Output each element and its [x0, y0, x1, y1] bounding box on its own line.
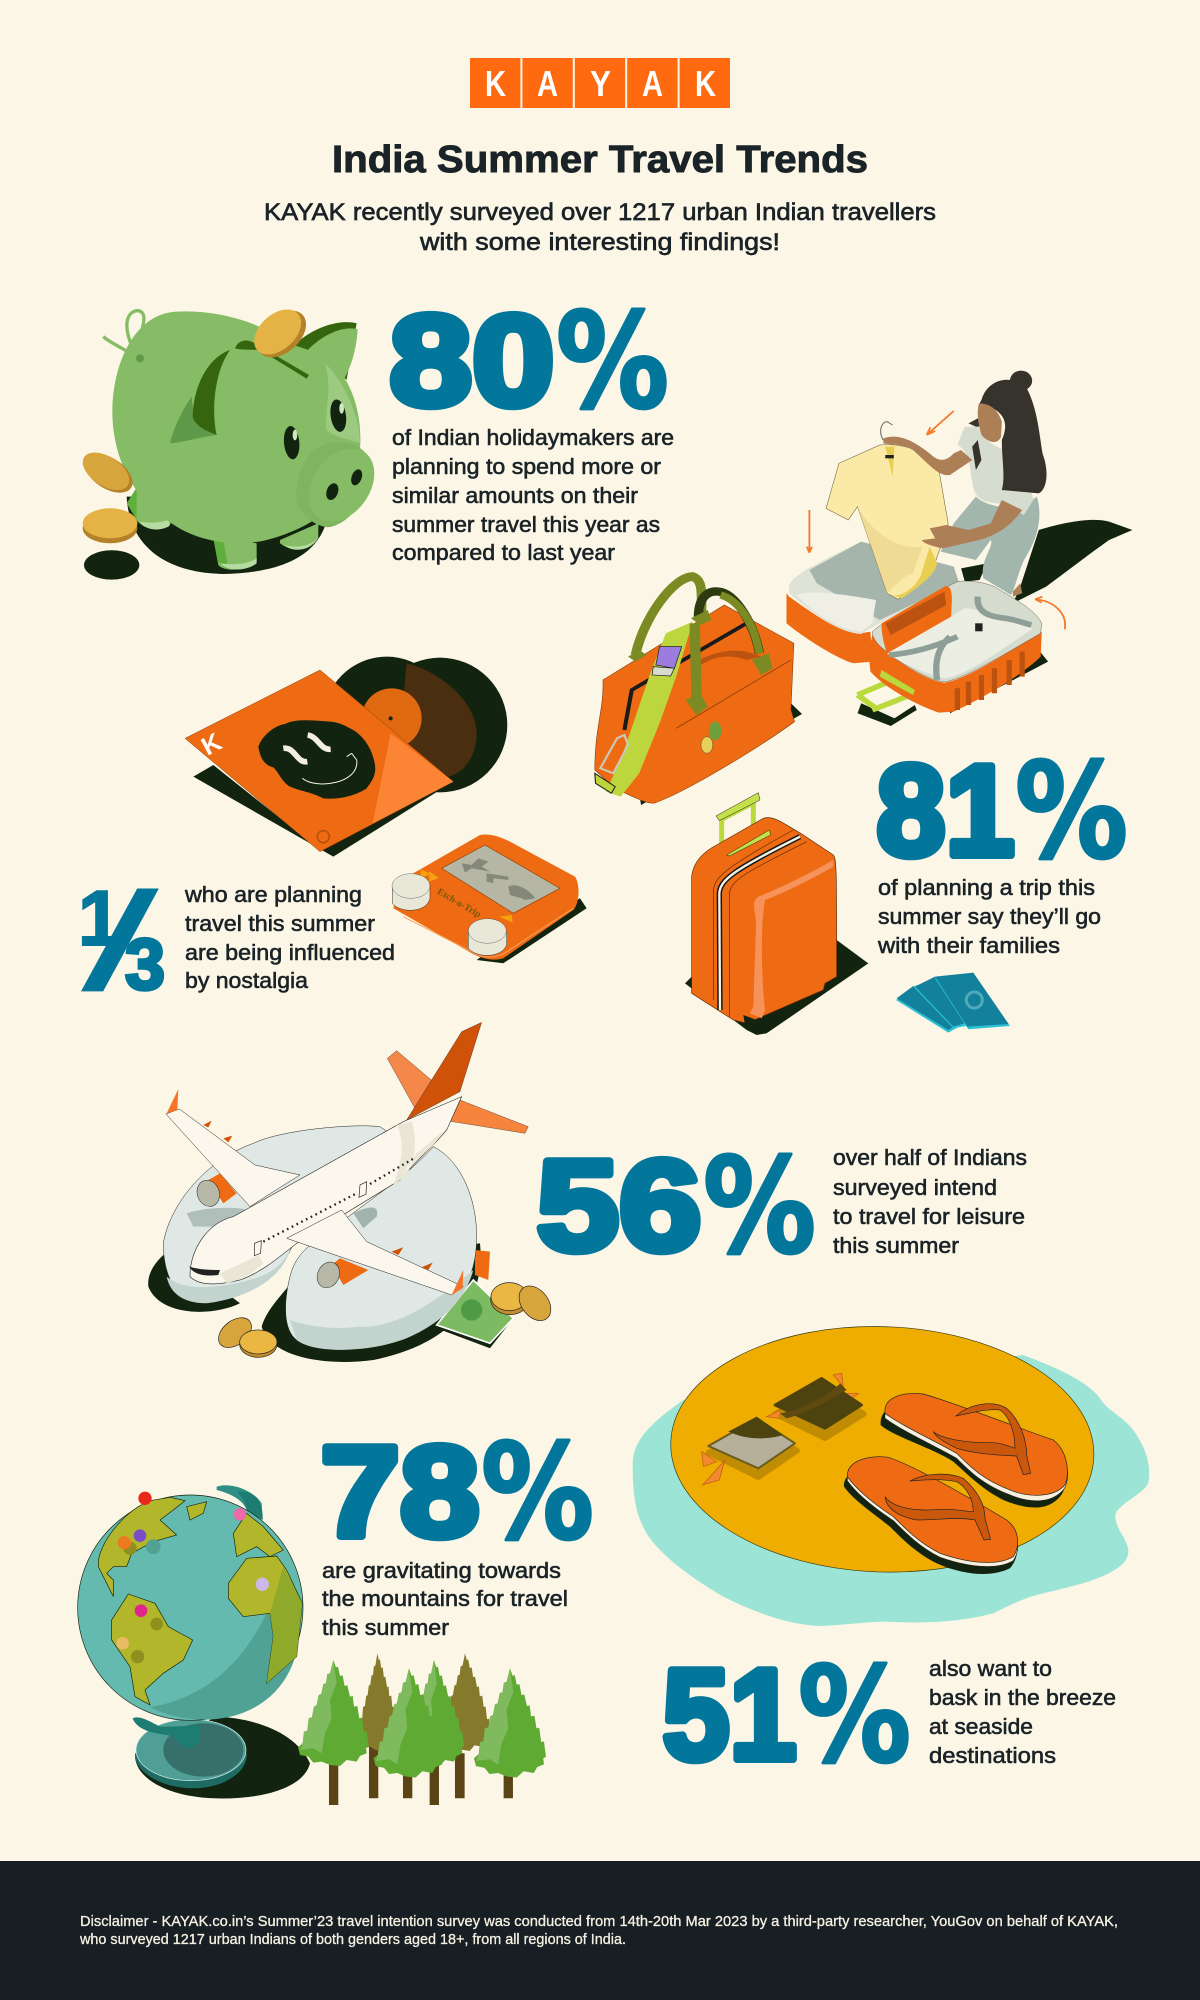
illustration: globe with pins — [78, 1485, 310, 1798]
text: nostalgia — [184, 882, 395, 993]
stat: 56%: 56 — [536, 1134, 702, 1278]
footer panel: disclaimer: Disclaimer - KAYAK.co.in’s Summer’23 travel intention survey was conducted from 14th-20th Mar 2023 by a third-party researcher, YouGov on behalf of KAYAK, — [80, 1914, 1118, 1930]
stand — [133, 1485, 263, 1788]
illustration: etch-a-sketch toy: Etch-a-Trip — [435, 886, 483, 920]
water — [633, 1355, 1149, 1626]
torso — [957, 427, 1033, 515]
text: nostalgia: travel this summer — [185, 911, 376, 936]
illustration: orange duffel bag — [595, 577, 802, 805]
text: leisure: this summer — [833, 1233, 960, 1258]
text: 80% description: of Indian holidaymakers are — [392, 425, 674, 450]
stat: 51% — [662, 1639, 911, 1793]
plane tail — [387, 1051, 433, 1108]
text: leisure: over half of Indians — [833, 1145, 1027, 1170]
stat: 78%: 78 — [320, 1420, 480, 1564]
front wing — [332, 1258, 368, 1285]
illustration: pine trees — [298, 1653, 546, 1805]
sunglasses — [702, 1373, 864, 1485]
text: mountains: are gravitating towards — [322, 1558, 561, 1583]
stat: 78%: % — [481, 1416, 594, 1570]
text: seaside: bask in the breeze — [929, 1685, 1116, 1710]
hair — [968, 380, 1047, 493]
text: nostalgia: are being influenced — [185, 940, 395, 965]
stat: 78% — [320, 1416, 594, 1570]
illustration: wheeled suitcase — [685, 793, 868, 1035]
text: leisure — [833, 1145, 1027, 1258]
text: families: summer say they’ll go — [878, 904, 1101, 929]
flip-flop: bottom — [844, 1457, 1018, 1574]
map pins — [116, 1492, 269, 1663]
stat: 80% — [390, 285, 669, 439]
text: families: of planning a trip this — [878, 875, 1095, 900]
text: seaside: also want to — [929, 1656, 1052, 1681]
arrows — [807, 411, 1065, 629]
text: 80% description — [392, 425, 674, 565]
shirt — [826, 445, 948, 599]
text: mountains: the mountains for travel — [322, 1586, 568, 1611]
illustration: vinyl record: K — [197, 728, 227, 761]
footer panel: disclaimer: who surveyed 1217 urban Indians of both genders aged 18+, from all regions of India. — [79, 1932, 626, 1948]
stat: 1/3 fraction: / — [81, 864, 159, 1020]
stat: 51%: 51 — [662, 1643, 796, 1787]
text: mountains — [322, 1558, 568, 1640]
illustration: etch-a-sketch toy — [392, 835, 587, 963]
stat: 81%: % — [1015, 735, 1128, 889]
illustration: beach mat, sunglasses and flip-flops — [633, 1319, 1149, 1626]
illustration: vinyl record — [185, 657, 507, 857]
suitcase right half — [858, 581, 1048, 726]
logo: KAYAK: K — [695, 63, 716, 104]
logo: KAYAK — [470, 58, 730, 108]
head — [978, 403, 1002, 442]
title: India Summer Travel Trends — [332, 139, 868, 181]
logo: KAYAK: A — [537, 63, 558, 104]
stat: 81%: 81 — [876, 739, 1014, 883]
text: seaside — [929, 1656, 1116, 1768]
continents — [98, 1497, 302, 1705]
text: leisure: to travel for leisure — [833, 1204, 1025, 1229]
text: 80% description: compared to last year — [392, 540, 616, 565]
stat: 56%: % — [703, 1130, 816, 1284]
flip-flop: top — [881, 1393, 1068, 1508]
stat: 1/3 fraction: 1 — [78, 874, 121, 962]
stat: 56% — [536, 1130, 816, 1284]
text: nostalgia: by nostalgia — [185, 968, 308, 993]
subtitle: KAYAK recently surveyed over 1217 urban Indian travellers — [264, 199, 936, 226]
text: seaside: destinations — [929, 1743, 1056, 1768]
money and coins — [213, 1250, 557, 1357]
stat: 51%: % — [798, 1639, 911, 1793]
stat: 80%: 80 — [390, 289, 554, 433]
text: 80% description: planning to spend more or — [392, 454, 662, 479]
logo: KAYAK: A — [642, 63, 663, 104]
globe sphere — [78, 1495, 303, 1720]
text: mountains: this summer — [322, 1615, 450, 1640]
subtitle: with some interesting findings! — [419, 229, 780, 256]
text: families: with their families — [877, 933, 1060, 958]
logo: KAYAK: K — [485, 63, 506, 104]
rear wing — [166, 1109, 300, 1207]
logo: KAYAK: Y — [590, 63, 611, 104]
suitcase left half — [786, 542, 959, 663]
stat: 1/3 fraction: 3 — [125, 925, 165, 1005]
pillows — [163, 1126, 400, 1303]
text: 80% description: similar amounts on their — [392, 483, 639, 508]
pillow shadows — [148, 1243, 481, 1362]
pants — [941, 497, 1039, 595]
stat: 81% — [876, 735, 1128, 889]
text: 80% description: summer travel this year as — [392, 512, 660, 537]
text: nostalgia: who are planning — [184, 882, 362, 907]
fuselage — [190, 1097, 462, 1284]
subtitle — [264, 199, 936, 256]
arms — [883, 437, 1022, 548]
beach mat — [667, 1319, 1098, 1579]
illustration: passports — [896, 973, 1010, 1033]
text: leisure: surveyed intend — [833, 1175, 997, 1200]
illustration: woman packing a suitcase — [786, 371, 1132, 726]
stat: 80%: % — [556, 285, 669, 439]
text: seaside: at seaside — [929, 1714, 1033, 1739]
footer panel: disclaimer — [0, 1861, 1200, 2000]
illustration: plane on neck pillow — [148, 1022, 557, 1362]
text: families — [877, 875, 1101, 958]
illustration: piggy bank — [76, 301, 388, 580]
shadow of woman — [961, 520, 1132, 603]
